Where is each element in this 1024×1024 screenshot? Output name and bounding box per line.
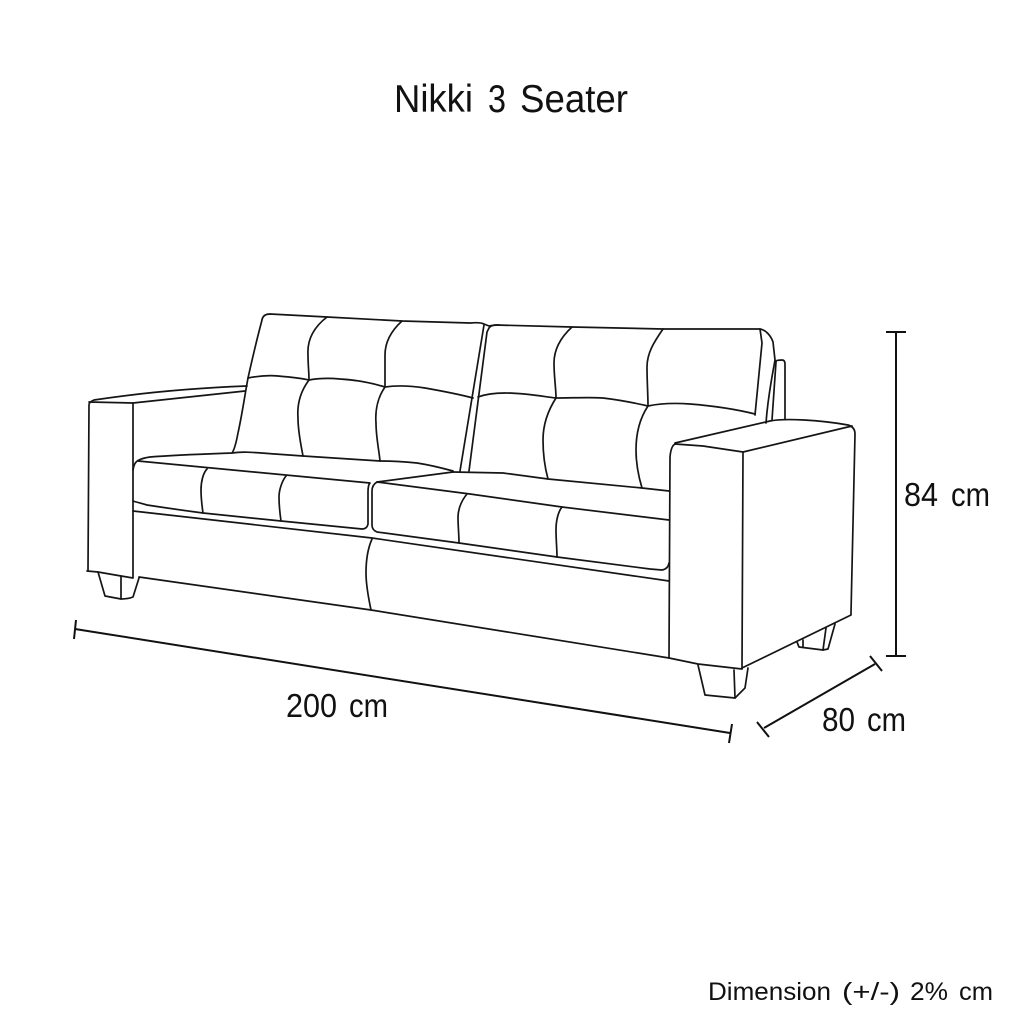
height dimension line [886,332,906,656]
right seat cushion [372,472,669,570]
right front leg [698,665,748,698]
tolerance note: Dimension [708,978,831,1006]
title: 3 [488,78,506,121]
right arm [669,420,855,669]
left arm [87,386,247,578]
left front leg [98,572,139,599]
sofa base front [133,511,669,658]
width dimension line [74,620,732,743]
title: Nikki [394,78,473,121]
depth label: cm [867,701,906,738]
tolerance note: 2% [910,978,948,1006]
depth dimension line [757,656,882,737]
width label: 200 [286,687,337,724]
width label: cm [349,687,388,724]
depth label: 80 [822,701,855,738]
rear frame behind right cushion [760,329,785,423]
left seat cushion [133,452,453,529]
title: Seater [520,78,628,121]
left back cushion [232,314,499,471]
tolerance note: (+/-) [842,978,900,1006]
height label: 84 [904,476,938,513]
right back cushion [469,325,762,488]
height label: cm [951,476,990,513]
sofa line drawing [87,314,855,698]
rear leg [797,624,835,650]
tolerance note: cm [959,978,993,1006]
